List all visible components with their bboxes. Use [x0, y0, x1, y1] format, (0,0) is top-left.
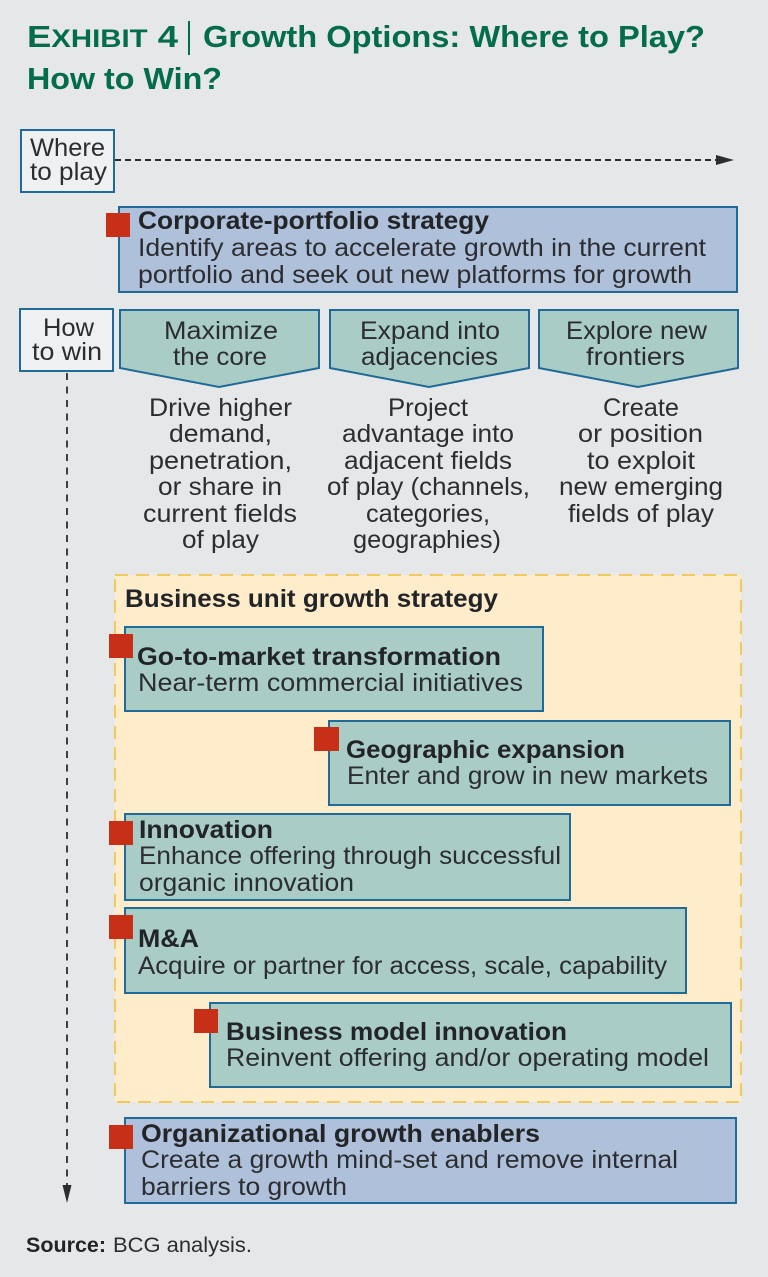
- card: geographic expansion: Geographic expansion: [346, 736, 625, 764]
- column: expand into adjacencies: advantage into: [342, 420, 514, 448]
- card: innovation: organic innovation: [139, 869, 354, 897]
- title: How to Win?: [27, 61, 222, 96]
- panel: organizational growth enablers: barriers to growth: [141, 1173, 347, 1201]
- column: maximize the core: penetration,: [149, 447, 292, 475]
- column: expand into adjacencies: adjacencies: [361, 343, 498, 371]
- card: geographic expansion: Enter and grow in new markets: [347, 762, 708, 790]
- axis: where to play: [21, 130, 114, 192]
- card: business model innovation: Business model innovation: [226, 1018, 567, 1046]
- card: m&a: [109, 908, 686, 993]
- source note: BCG analysis.: [113, 1234, 252, 1257]
- card: m&a: Acquire or partner for access, scale, capability: [138, 952, 668, 980]
- column: expand into adjacencies: Expand into: [360, 317, 500, 345]
- card: go-to-market transformation: Go-to-market transformation: [137, 643, 501, 671]
- axis: how to win: to win: [32, 338, 102, 366]
- column: maximize the core: Maximize: [164, 317, 278, 345]
- axis: where to play: to play: [30, 158, 108, 186]
- column: maximize the core: the core: [173, 343, 267, 371]
- card: go-to-market transformation: [109, 627, 543, 711]
- card: innovation: [109, 814, 570, 900]
- column: explore new frontiers: frontiers: [586, 343, 685, 371]
- column: explore new frontiers: to exploit: [587, 447, 695, 475]
- axis: where to play: Where: [30, 134, 105, 162]
- column: explore new frontiers: Explore new: [566, 317, 708, 345]
- card: business model innovation: Reinvent offering and/or operating model: [226, 1044, 709, 1072]
- card: m&a: M&A: [138, 925, 199, 953]
- heading: business unit growth strategy: Business unit growth strategy: [125, 585, 498, 613]
- axis: how to win: [20, 309, 113, 371]
- arrow: how to win: [62, 373, 72, 1203]
- column: expand into adjacencies: of play (channels,: [327, 473, 530, 501]
- title: [27, 19, 705, 96]
- column: maximize the core: Drive higher: [149, 394, 292, 422]
- title: Growth Options: Where to Play?: [203, 19, 705, 54]
- axis: how to win: How: [43, 314, 95, 342]
- column: explore new frontiers: or position: [578, 420, 703, 448]
- column: expand into adjacencies: adjacent fields: [344, 447, 512, 475]
- column: expand into adjacencies: [327, 310, 530, 554]
- title: EXHIBIT 4: [27, 19, 179, 54]
- panel: corporate-portfolio strategy: Corporate-portfolio strategy: [138, 207, 489, 235]
- panel: business unit growth strategy: [109, 575, 741, 1102]
- panel: organizational growth enablers: [109, 1118, 736, 1203]
- column: expand into adjacencies: categories,: [366, 500, 490, 528]
- column: maximize the core: [120, 310, 319, 554]
- column: maximize the core: or share in: [158, 473, 282, 501]
- column: explore new frontiers: new emerging: [559, 473, 723, 501]
- source note: [26, 1234, 252, 1257]
- column: explore new frontiers: Create: [603, 394, 679, 422]
- card: innovation: Enhance offering through successful: [139, 842, 561, 870]
- column: explore new frontiers: fields of play: [568, 500, 715, 528]
- column: maximize the core: demand,: [169, 420, 272, 448]
- panel: corporate-portfolio strategy: portfolio and seek out new platforms for growth: [138, 261, 692, 289]
- card: innovation: Innovation: [139, 816, 273, 844]
- panel: organizational growth enablers: Create a growth mind-set and remove internal: [141, 1146, 678, 1174]
- column: expand into adjacencies: Project: [388, 394, 468, 422]
- card: geographic expansion: [314, 721, 730, 805]
- column: maximize the core: of play: [182, 526, 260, 554]
- column: explore new frontiers: [539, 310, 738, 528]
- panel: organizational growth enablers: Organizational growth enablers: [141, 1120, 540, 1148]
- card: business model innovation: [194, 1003, 731, 1087]
- card: go-to-market transformation: Near-term commercial initiatives: [138, 669, 523, 697]
- source note: Source:: [26, 1234, 106, 1257]
- arrow: where to play: [115, 155, 734, 165]
- column: expand into adjacencies: geographies): [353, 526, 501, 554]
- panel: corporate-portfolio strategy: [106, 207, 737, 292]
- panel: corporate-portfolio strategy: Identify areas to accelerate growth in the current: [138, 234, 706, 262]
- column: maximize the core: current fields: [143, 500, 297, 528]
